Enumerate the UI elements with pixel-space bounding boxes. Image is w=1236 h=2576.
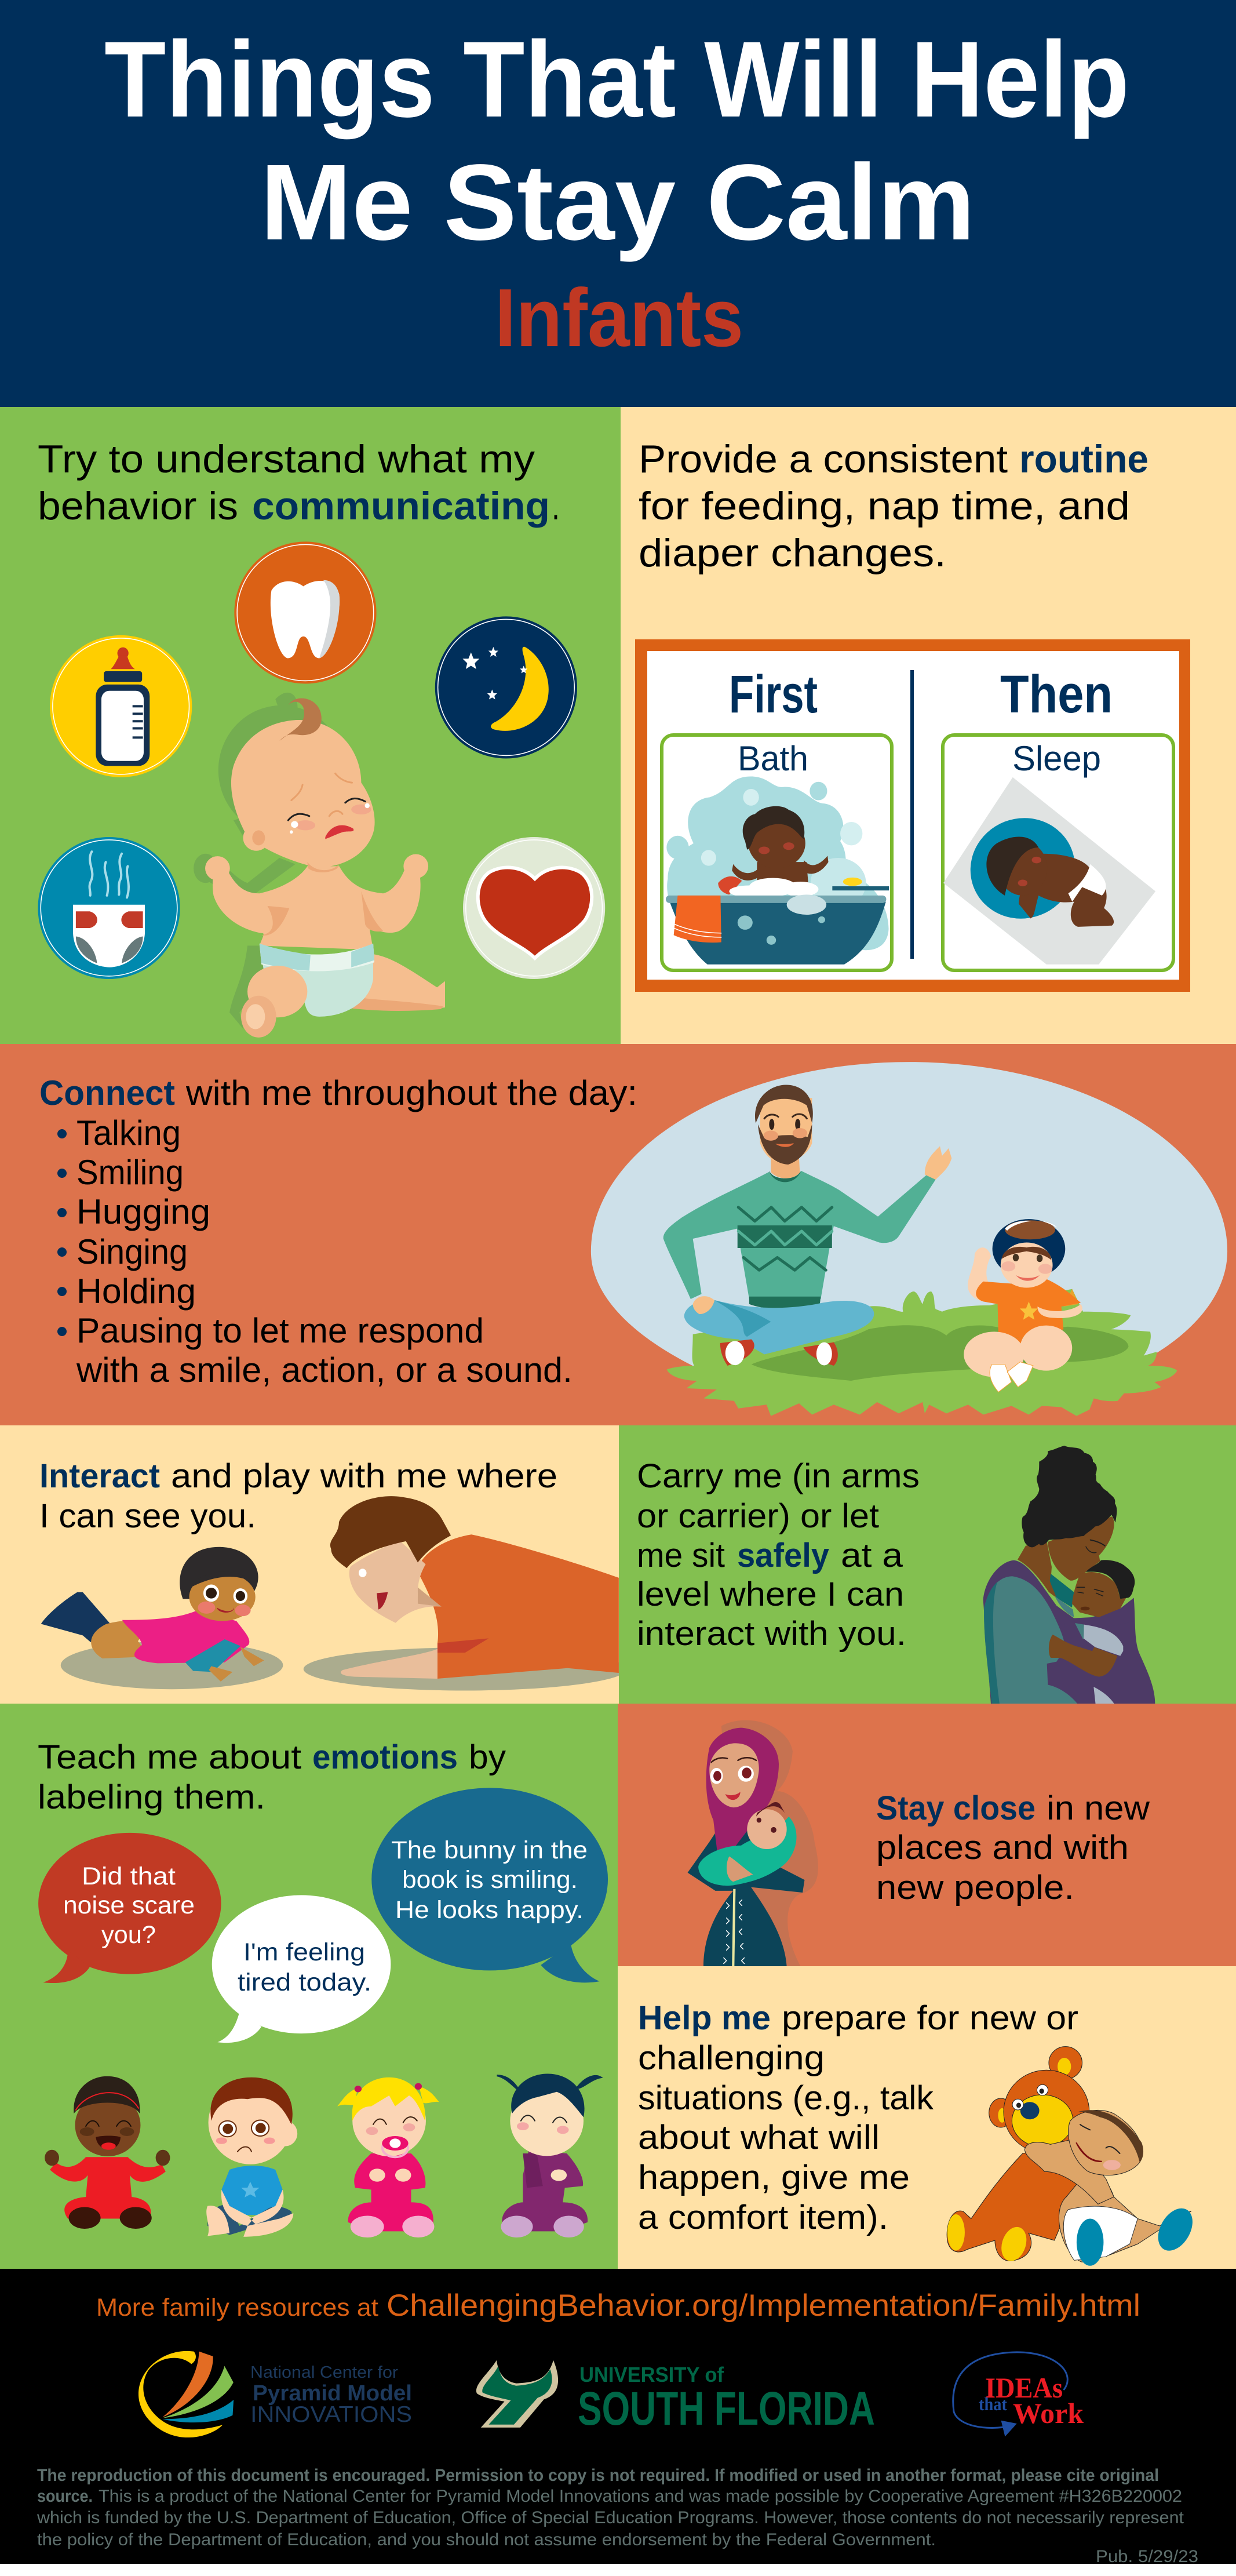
title: Things That Will Help [104, 20, 1129, 140]
baby boy with helmet [964, 1219, 1082, 1392]
illustration: baby hugging teddy bear [947, 2047, 1199, 2266]
title: Me Stay Calm [260, 143, 975, 263]
speech bubble: red: Did that [82, 1862, 176, 1890]
heading: carry: safely [737, 1537, 829, 1574]
heading: carry: or carrier) or let [637, 1497, 879, 1535]
legal text [37, 2466, 1184, 2549]
heading: interact: Interact [39, 1457, 160, 1495]
logo: Pyramid Model Innovations: National Center for [250, 2363, 398, 2382]
legal text: the policy of the Department of Education, and you should not assume endorsement by the Federal Government. [37, 2530, 936, 2549]
resource link: More family resources at [96, 2294, 378, 2322]
speech bubble: blue: He looks happy. [395, 1896, 584, 1924]
legal text: source. [37, 2487, 93, 2506]
text: stay close: new people. [876, 1869, 1074, 1906]
icon: heart [463, 837, 605, 979]
text: stay close: Stay close [876, 1789, 1036, 1827]
card: Bath [662, 735, 892, 970]
logo: IDEAs that Work: that [979, 2393, 1007, 2414]
speech bubble: blue: The bunny in the [391, 1836, 588, 1864]
heading: carry: level where I can [637, 1576, 904, 1613]
logo: University of South Florida [476, 2360, 875, 2435]
heading: carry: at a [841, 1537, 903, 1574]
icon: bottle [50, 635, 192, 777]
heading: emotions: Teach me about [38, 1738, 301, 1776]
text: stay close: in new [1047, 1789, 1150, 1827]
bullet list [57, 1114, 573, 1389]
illustration: crying baby [194, 693, 445, 1038]
speech bubble: white [212, 1895, 391, 2043]
text: help me [638, 1999, 1078, 2236]
heading: interact [39, 1457, 557, 1535]
label: First: First [729, 665, 818, 724]
panel: footer [0, 2269, 1236, 2566]
text: stay close: places and with [876, 1829, 1129, 1866]
bullet list: Smiling [76, 1153, 184, 1192]
heading: carry [637, 1457, 920, 1653]
heading: emotions: labeling them. [38, 1778, 265, 1816]
card: Bath: Bath [738, 739, 808, 778]
text: help me: a comfort item). [638, 2199, 888, 2236]
bullet list: Pausing to let me respond [76, 1311, 484, 1350]
bullet list: Talking [76, 1114, 181, 1152]
resource link: ChallengingBehavior.org/Implementation/Family.html [387, 2288, 1140, 2323]
icon: tooth [234, 541, 377, 683]
logo: University of South Florida: UNIVERSITY of [579, 2363, 724, 2386]
subtitle: Infants: Infants [495, 272, 743, 364]
heading: interact: I can see you. [39, 1497, 256, 1535]
logo: IDEAs that Work: IDEAs [985, 2371, 1063, 2404]
heading: routine: routine [1019, 437, 1149, 481]
panel: routine [621, 407, 1236, 1045]
panel: help me prepare [618, 1966, 1236, 2269]
text: help me: situations (e.g., talk [638, 2079, 934, 2117]
illustration: mother in hijab holding baby [688, 1720, 818, 1966]
illustrations: four babies [45, 2074, 601, 2237]
speech bubble: red: you? [101, 1921, 156, 1949]
card: Sleep: Sleep [1012, 739, 1101, 778]
adult [418, 1534, 619, 1679]
speech bubble: red: noise scare [63, 1891, 195, 1919]
bullet list: with a smile, action, or a sound. [76, 1351, 573, 1389]
heading: emotions [38, 1738, 506, 1816]
father [663, 1085, 951, 1366]
heading: communicating: . [552, 484, 560, 528]
logo: Pyramid Model Innovations: Pyramid Model [253, 2381, 412, 2406]
bullet list: Singing [76, 1232, 188, 1271]
panel: connect [0, 1044, 1236, 1425]
logo: IDEAs that Work [953, 2352, 1084, 2437]
illustration: mother carrying baby [983, 1446, 1155, 1704]
logo: University of South Florida: SOUTH FLORIDA [578, 2382, 875, 2435]
heading: carry: Carry me (in arms [637, 1457, 920, 1495]
bullet list: Holding [76, 1272, 196, 1311]
resource link [96, 2288, 1140, 2323]
heading: communicating: communicating [252, 484, 550, 528]
speech bubble: red [38, 1833, 221, 1983]
panel: carry [619, 1425, 1236, 1704]
first-then chart [635, 639, 1190, 992]
heading: interact: and play with me where [171, 1457, 557, 1495]
panel: understand behavior [0, 407, 621, 1045]
text: help me: about what will [638, 2119, 880, 2156]
heading: communicating: behavior is [38, 484, 238, 528]
speech bubble: blue [371, 1788, 608, 1982]
text: help me: prepare for new or [782, 1999, 1078, 2037]
text: help me: challenging [638, 2039, 825, 2077]
panel: stay close [618, 1704, 1236, 1966]
heading: routine: diaper changes. [639, 531, 946, 575]
heading: carry: interact with you. [637, 1615, 906, 1653]
heading: routine: for feeding, nap time, and [639, 484, 1130, 528]
panel: interact [0, 1425, 626, 1704]
legal text: The reproduction of this document is encouraged. Permission to copy is not required. If modified or used in another format, please cite original [37, 2466, 1159, 2485]
heading: emotions: by [469, 1738, 506, 1776]
baby: shy [497, 2074, 601, 2237]
baby: pacifier [337, 2077, 439, 2237]
speech bubble: blue: book is smiling. [402, 1866, 578, 1894]
text: help me: happen, give me [638, 2159, 910, 2196]
text: stay close [876, 1789, 1150, 1906]
title [104, 20, 1129, 263]
label: Then: Then [1000, 665, 1113, 724]
baby: sad [206, 2077, 297, 2237]
heading: communicating [38, 437, 560, 528]
heading: carry: me sit [637, 1537, 725, 1574]
logo: IDEAs that Work: Work [1013, 2397, 1084, 2429]
heading: connect: with me throughout the day: [185, 1074, 637, 1112]
baby: laughing [45, 2076, 170, 2229]
logo: Pyramid Model Innovations [138, 2351, 412, 2437]
illustration: father and baby on grass [591, 1062, 1227, 1416]
heading: connect: Connect [39, 1074, 175, 1112]
speech bubble: white: I'm feeling [243, 1938, 365, 1966]
heading: communicating: Try to understand what my [38, 437, 535, 481]
text: help me: Help me [638, 1999, 771, 2037]
heading: emotions: emotions [312, 1738, 458, 1776]
illustration: crawling baby and adult [41, 1496, 626, 1691]
panel: header [0, 0, 1236, 407]
panel: emotions [0, 1704, 618, 2269]
card: Sleep [943, 735, 1173, 970]
heading: routine [639, 437, 1149, 575]
publication date: Pub. 5/29/23 [1096, 2547, 1198, 2566]
heading: routine: Provide a consistent [639, 437, 1008, 481]
speech bubble: white: tired today. [238, 1969, 371, 1996]
baby [41, 1592, 110, 1642]
bullet list: Hugging [76, 1192, 210, 1231]
logo: Pyramid Model Innovations: INNOVATIONS [250, 2402, 412, 2427]
legal text: which is funded by the U.S. Department of Education, Office of Special Education Programs. However, those contents do not necessarily represent [37, 2508, 1184, 2527]
legal text: This is a product of the National Center for Pyramid Model Innovations and was made possible by Cooperative Agreement #H326B220002 [99, 2487, 1182, 2506]
icon: diaper [38, 837, 180, 979]
icon: moon [435, 616, 577, 758]
